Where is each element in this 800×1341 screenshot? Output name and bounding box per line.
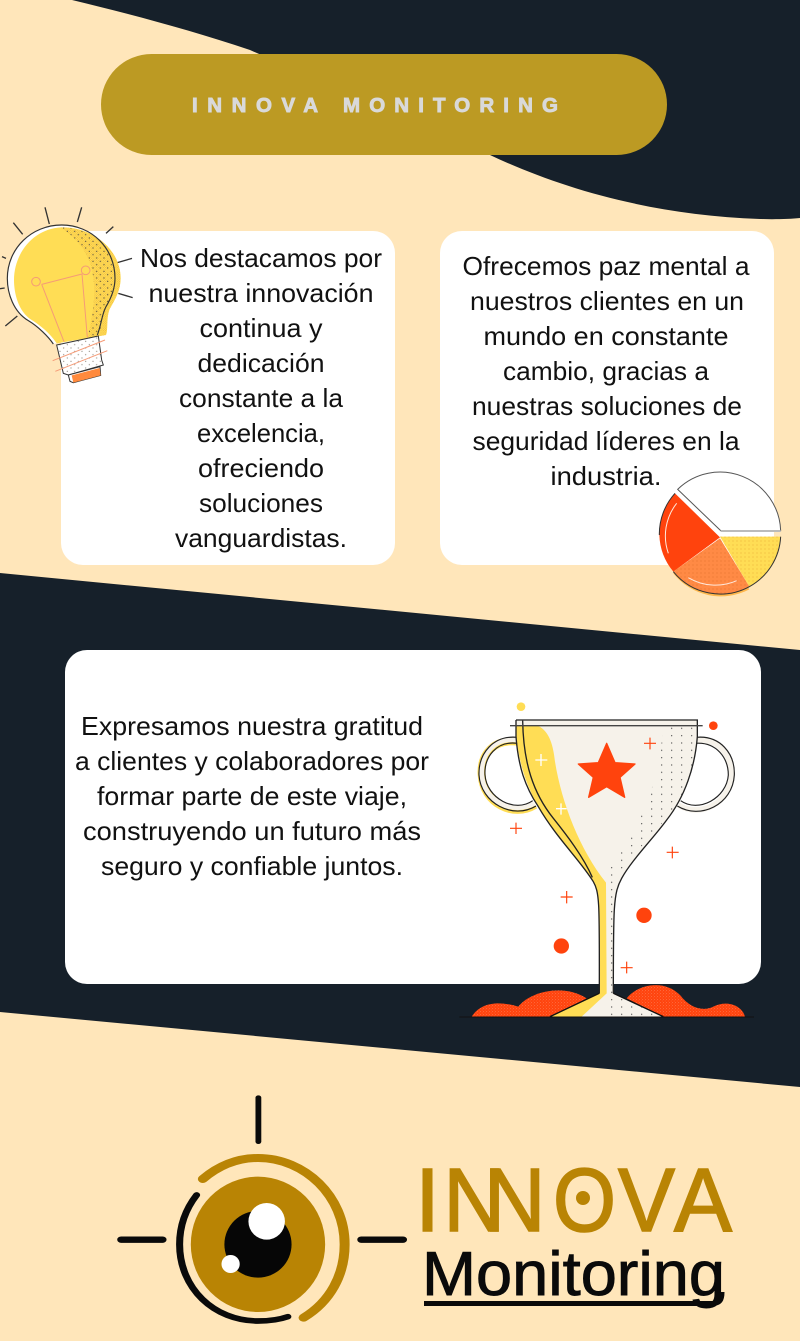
text: peace of mind: cambio, gracias a: [503, 356, 710, 386]
text: innovation: excelencia,: [197, 418, 325, 448]
title: [192, 94, 558, 117]
logo text: INNOVA: V: [618, 1151, 675, 1251]
logo: eye icon: [121, 1098, 403, 1321]
text: gratitude: formar parte de este viaje,: [97, 781, 407, 811]
text: gratitude: seguro y confiable juntos.: [101, 851, 403, 881]
text: peace of mind: seguridad líderes en la: [472, 426, 740, 456]
icon: pie chart: [659, 472, 781, 596]
text: innovation: constante a la: [179, 383, 344, 413]
panel: innovation card: [61, 231, 395, 565]
text: innovation: nuestra innovación: [148, 278, 374, 308]
trophy cup: [516, 720, 697, 1017]
text: gratitude: construyendo un futuro más: [83, 816, 421, 846]
trophy star: [578, 743, 635, 797]
title: INNOVA: [192, 94, 318, 117]
logo text: INNOVA: A: [674, 1151, 732, 1251]
icon: trophy: [459, 702, 754, 1017]
text: gratitude: Expresamos nuestra gratitud: [81, 711, 423, 741]
text: gratitude: [75, 711, 429, 881]
trophy base: [459, 985, 754, 1017]
text: peace of mind: nuestras soluciones de: [472, 391, 742, 421]
diagonal dark band: [0, 573, 800, 1087]
trophy handles: [479, 737, 734, 811]
text: peace of mind: mundo en constante: [484, 321, 728, 351]
text: peace of mind: [462, 251, 750, 491]
text: gratitude: a clientes y colaboradores por: [75, 746, 429, 776]
text: peace of mind: nuestros clientes en un: [470, 286, 744, 316]
text: innovation: Nos destacamos por: [140, 243, 382, 273]
text: innovation: vanguardistas.: [175, 523, 347, 553]
text: innovation: soluciones: [199, 488, 323, 518]
logo underline: [424, 1292, 722, 1304]
logo: wordmark: [415, 1150, 732, 1309]
logo text: INNOVA: NN: [443, 1150, 539, 1250]
logo text: INNOVA: O: [553, 1151, 616, 1251]
sparkles and dots: [510, 702, 718, 973]
text: peace of mind: Ofrecemos paz mental a: [462, 251, 750, 281]
logo text: INNOVA: I: [415, 1151, 440, 1251]
text: innovation: [140, 243, 382, 553]
title pill: [101, 54, 667, 155]
icon: light bulb: [0, 207, 133, 383]
text: innovation: dedicación: [198, 348, 324, 378]
text: innovation: continua y: [200, 313, 322, 343]
text: innovation: ofreciendo: [198, 453, 324, 483]
logo text: Monitoring: Monitoring: [422, 1240, 725, 1309]
text: peace of mind: industria.: [550, 461, 662, 491]
logo text: INNOVA: [415, 1150, 732, 1251]
top dark wave shape: [72, 0, 800, 219]
panel: peace of mind card: [440, 231, 774, 565]
title: MONITORING: [343, 94, 558, 117]
panel: gratitude card: [65, 650, 761, 984]
